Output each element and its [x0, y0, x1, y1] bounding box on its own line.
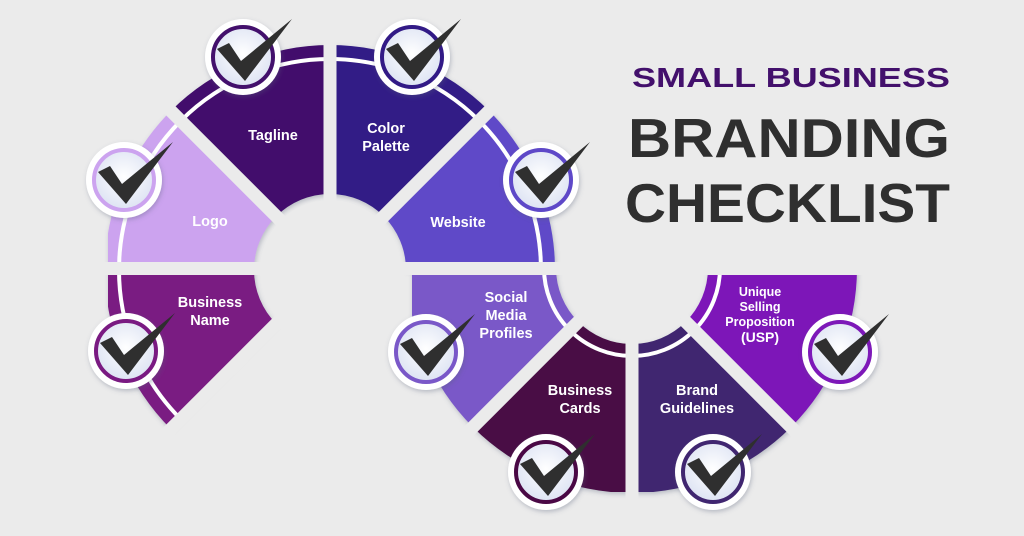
icon: check brand guidelines — [675, 434, 762, 510]
label: business name: Business — [178, 295, 242, 311]
label: usp: Selling — [740, 300, 780, 314]
segment: business name — [105, 270, 276, 429]
label: usp: Proposition — [725, 315, 795, 329]
label: logo: Logo — [192, 214, 228, 230]
label: tagline: Tagline — [248, 128, 298, 144]
lower ring — [410, 275, 860, 496]
segment: tagline — [171, 45, 330, 216]
upper ring — [106, 44, 558, 426]
icon: check social media — [388, 314, 475, 390]
label: business cards: Cards — [559, 401, 601, 417]
icon: check color palette — [374, 19, 461, 95]
segment: logo — [105, 111, 276, 270]
label: business name: Name — [190, 313, 230, 329]
label: usp: (USP) — [741, 329, 779, 345]
segment: website — [384, 111, 555, 270]
segment: color palette — [330, 45, 489, 216]
icon: check business cards — [508, 434, 595, 510]
icon: check logo — [86, 142, 173, 218]
label: social media profiles: Profiles — [479, 326, 533, 342]
label: business cards: Business — [548, 383, 612, 399]
title: CHECKLIST — [625, 172, 950, 234]
segment: usp — [686, 268, 857, 427]
segment: business cards — [473, 322, 632, 493]
segment: brand guidelines — [632, 322, 791, 493]
title — [625, 62, 950, 234]
label: brand guidelines: Guidelines — [660, 401, 734, 417]
label: color palette: Color — [367, 121, 405, 137]
icon: check tagline — [205, 19, 292, 95]
title: BRANDING — [628, 107, 950, 169]
segment: social media — [407, 268, 578, 427]
label: brand guidelines: Brand — [676, 383, 718, 399]
label: color palette: Palette — [362, 139, 410, 155]
label: social media profiles: Media — [485, 308, 527, 324]
label: website: Website — [430, 215, 486, 231]
icon: check website — [503, 142, 590, 218]
title: SMALL BUSINESS — [632, 62, 950, 93]
icon: check usp — [802, 314, 889, 390]
label: usp: Unique — [739, 285, 781, 299]
icon: check business name — [88, 313, 175, 389]
label: social media profiles: Social — [485, 290, 527, 306]
